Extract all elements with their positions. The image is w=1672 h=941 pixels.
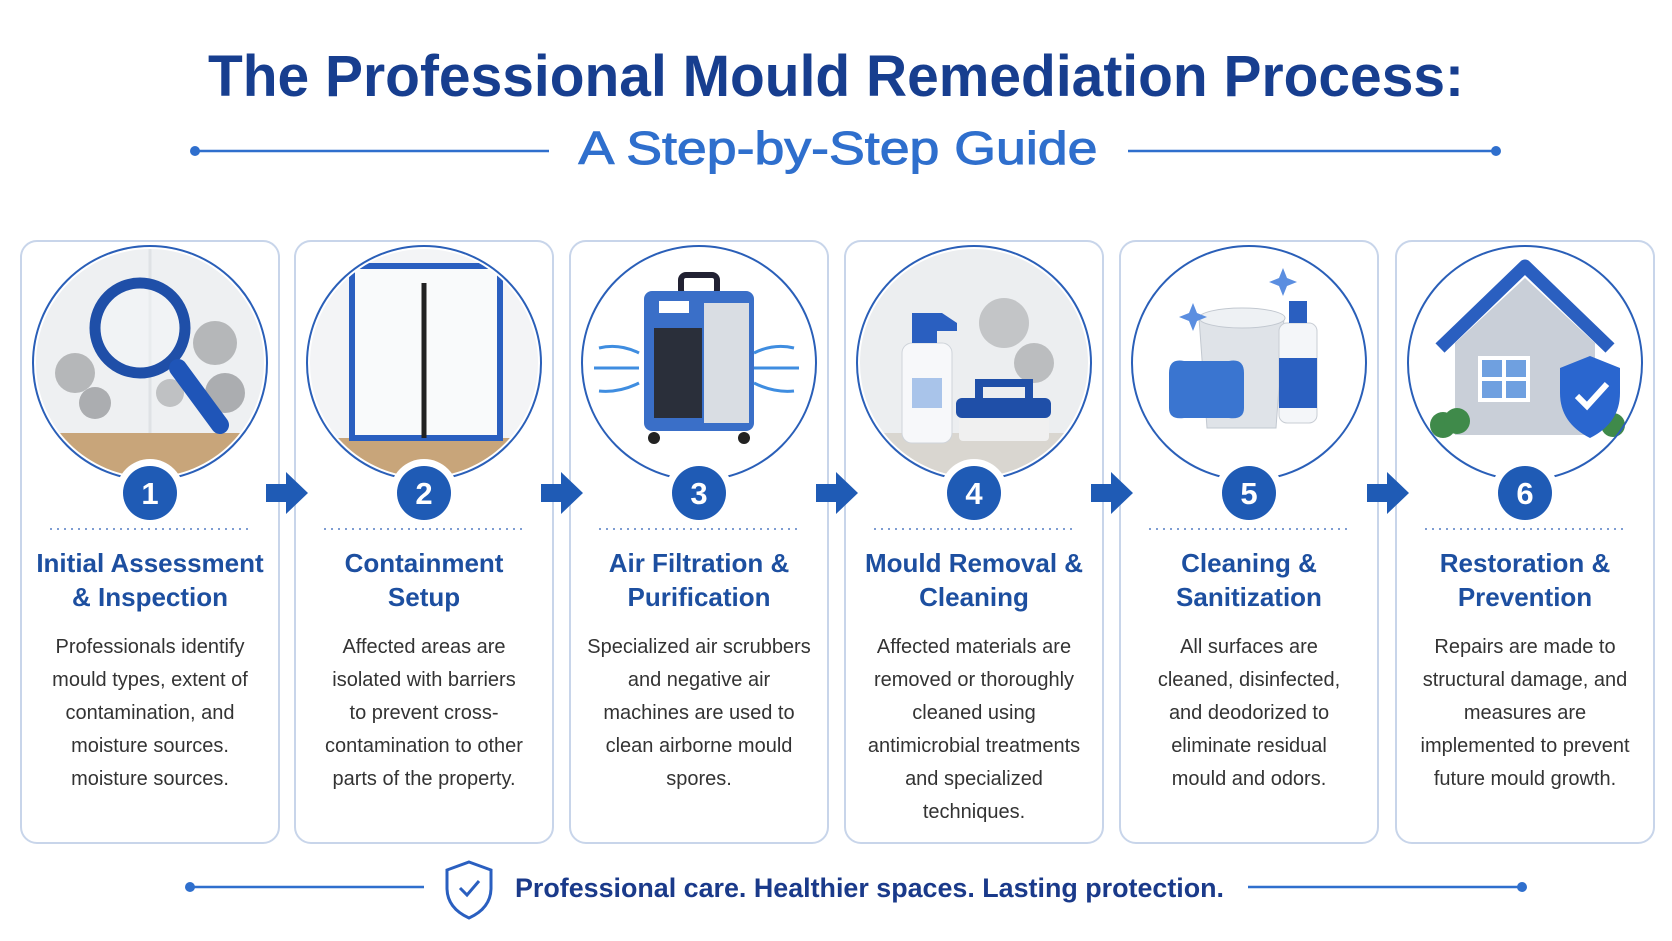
body text: clean airborne mould bbox=[606, 735, 792, 757]
badge 5 bbox=[1215, 459, 1283, 527]
badge 6 bbox=[1491, 459, 1559, 527]
body text: All surfaces are bbox=[1180, 636, 1318, 658]
title: The Professional Mould Remediation Process: bbox=[208, 44, 1464, 109]
body text: spores. bbox=[666, 768, 732, 790]
badge 4 bbox=[940, 459, 1008, 527]
icon: bucket, sponge, bottle bbox=[1169, 268, 1317, 428]
body text: to prevent cross- bbox=[350, 702, 498, 724]
subtitle: A Step-by-Step Guide bbox=[578, 122, 1098, 174]
subtitle bbox=[190, 122, 1501, 174]
panel: step 5 bbox=[1120, 241, 1378, 843]
heading: Cleaning bbox=[919, 582, 1029, 612]
panel: step 1 bbox=[21, 241, 279, 843]
footer tagline bbox=[185, 862, 1527, 918]
icon: spray bottle and brush bbox=[860, 249, 1088, 474]
panel: step 2 bbox=[295, 241, 553, 843]
badge 2 bbox=[390, 459, 458, 527]
body text: future mould growth. bbox=[1434, 768, 1616, 790]
badge 1 bbox=[116, 459, 184, 527]
heading: & Inspection bbox=[72, 582, 228, 612]
body text: moisture sources. bbox=[71, 735, 229, 757]
body text: mould types, extent of bbox=[52, 669, 248, 691]
body text: Specialized air scrubbers bbox=[587, 636, 811, 658]
body text: mould and odors. bbox=[1172, 768, 1326, 790]
body text: Repairs are made to bbox=[1434, 636, 1616, 658]
icon: shield bbox=[447, 862, 491, 918]
heading: Air Filtration & bbox=[609, 548, 789, 578]
badge 3: 3 bbox=[690, 476, 708, 511]
arrow 5 bbox=[1367, 472, 1409, 514]
body text: measures are bbox=[1464, 702, 1586, 724]
footer tagline: Professional care. Healthier spaces. Lasting protection. bbox=[515, 873, 1224, 903]
body text: Affected areas are bbox=[342, 636, 506, 658]
badge 4: 4 bbox=[965, 476, 983, 511]
body text: cleaned, disinfected, bbox=[1158, 669, 1340, 691]
icon: air scrubber bbox=[594, 275, 799, 444]
heading: Restoration & bbox=[1440, 548, 1610, 578]
panel: step 4 bbox=[845, 241, 1103, 843]
heading: Mould Removal & bbox=[865, 548, 1083, 578]
arrow 3 bbox=[816, 472, 858, 514]
heading: Cleaning & bbox=[1181, 548, 1317, 578]
icon: house with shield bbox=[1430, 266, 1625, 438]
body text: contamination to other bbox=[325, 735, 523, 757]
body text: parts of the property. bbox=[332, 768, 516, 790]
body text: Affected materials are bbox=[877, 636, 1071, 658]
badge 2: 2 bbox=[415, 476, 433, 511]
body text: contamination, and bbox=[65, 702, 235, 724]
badge 5: 5 bbox=[1240, 476, 1258, 511]
heading: Containment bbox=[345, 548, 504, 578]
heading: Purification bbox=[627, 582, 771, 612]
body text: and specialized bbox=[905, 768, 1043, 790]
body text: implemented to prevent bbox=[1420, 735, 1630, 757]
body text: cleaned using bbox=[912, 702, 1036, 724]
body text: removed or thoroughly bbox=[874, 669, 1074, 691]
body text: isolated with barriers bbox=[332, 669, 516, 691]
panel: step 6 bbox=[1396, 241, 1654, 843]
body text: and negative air bbox=[628, 669, 770, 691]
icon: magnifier on mouldy wall bbox=[36, 249, 264, 474]
heading: Prevention bbox=[1458, 582, 1592, 612]
heading: Setup bbox=[388, 582, 460, 612]
badge 6: 6 bbox=[1516, 476, 1534, 511]
heading: Sanitization bbox=[1176, 582, 1322, 612]
body text: structural damage, and bbox=[1423, 669, 1627, 691]
arrow 1 bbox=[266, 472, 308, 514]
badge 1: 1 bbox=[141, 476, 159, 511]
arrow 4 bbox=[1091, 472, 1133, 514]
icon: containment barrier bbox=[310, 249, 538, 474]
body text: antimicrobial treatments bbox=[868, 735, 1080, 757]
body text: machines are used to bbox=[603, 702, 795, 724]
body text: and deodorized to bbox=[1169, 702, 1329, 724]
panel: step 3 bbox=[570, 241, 828, 843]
body text: eliminate residual bbox=[1171, 735, 1327, 757]
heading: Initial Assessment bbox=[36, 548, 264, 578]
arrow 2 bbox=[541, 472, 583, 514]
badge 3 bbox=[665, 459, 733, 527]
body text: moisture sources. bbox=[71, 768, 229, 790]
body text: techniques. bbox=[923, 801, 1025, 823]
body text: Professionals identify bbox=[56, 636, 244, 658]
